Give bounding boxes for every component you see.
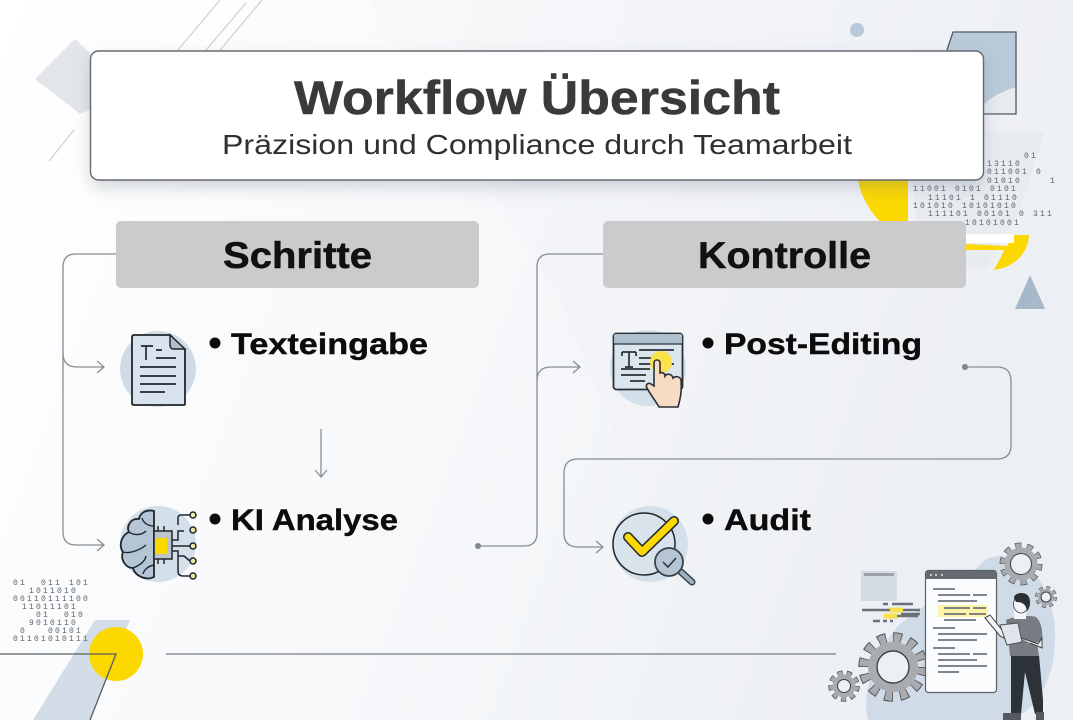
binary pattern top right: 11101 1 01110 — [928, 194, 1019, 203]
binary pattern bottom left: 01 011 101 — [13, 579, 90, 588]
illustration: small panel — [861, 571, 920, 621]
binary pattern top right: 011001 0 — [987, 168, 1043, 177]
step: KI Analyse: KI Analyse — [231, 504, 398, 537]
icon: document — [120, 331, 196, 407]
binary pattern top right: 10101001 — [965, 219, 1021, 228]
arrow: Texteingabe to KI Analyse — [320, 429, 322, 477]
binary pattern bottom left: 1011010 — [29, 587, 78, 596]
connector: Post-Editing to Audit — [564, 364, 1011, 547]
binary pattern top right: 01010 1 — [987, 177, 1057, 186]
decorative shapes top left — [35, 0, 262, 161]
step: Post-Editing: Post-Editing — [724, 328, 922, 361]
title: Workflow Übersicht — [294, 71, 780, 124]
binary pattern top right: 01 — [1024, 152, 1038, 161]
binary pattern bottom left — [13, 579, 90, 644]
title panel — [90, 51, 984, 180]
binary pattern bottom left: 0 00101 — [20, 627, 83, 636]
illustration: person presenting document with gears — [831, 546, 1055, 720]
icon: editing window with hand — [610, 330, 686, 407]
binary pattern top right: 13110 — [987, 160, 1022, 169]
binary pattern bottom left: 00110111100 — [13, 595, 90, 604]
illustration: person — [985, 593, 1044, 720]
illustration: small gear right — [1037, 588, 1055, 606]
icon: AI brain — [120, 506, 196, 582]
icon: audit checkmark with magnifier — [612, 506, 692, 582]
binary pattern top right — [913, 152, 1057, 228]
illustration: gear top — [1003, 546, 1039, 582]
decorative shapes top right — [850, 23, 1045, 309]
connector: KI Analyse to Kontrolle — [475, 254, 603, 549]
decorative shapes bottom left — [0, 620, 836, 720]
subtitle: Präzision und Compliance durch Teamarbeit — [222, 129, 852, 160]
binary pattern bottom left: 11011101 — [22, 603, 78, 612]
heading panel: Kontrolle: Kontrolle — [698, 235, 871, 276]
heading panel: Schritte: Schritte — [223, 235, 372, 276]
binary pattern bottom left: 01 010 — [36, 611, 85, 620]
heading panel: Kontrolle — [603, 221, 966, 288]
illustration: document window — [926, 570, 996, 692]
binary pattern top right: 111101 00101 0 311 — [928, 210, 1054, 219]
connector: Schritte to steps — [63, 254, 116, 545]
binary pattern top right: 11001 0101 0101 — [913, 185, 1018, 194]
heading panel: Schritte — [116, 221, 479, 288]
illustration: large gear — [865, 639, 921, 695]
binary pattern bottom left: 01101010111 — [13, 635, 90, 644]
step: Texteingabe: Texteingabe — [231, 328, 428, 361]
binary pattern top right: 101010 10101010 — [913, 202, 1018, 211]
step: Audit: Audit — [724, 504, 811, 537]
binary pattern bottom left: 9010110 — [29, 619, 78, 628]
illustration: small gear bottom — [831, 673, 857, 699]
